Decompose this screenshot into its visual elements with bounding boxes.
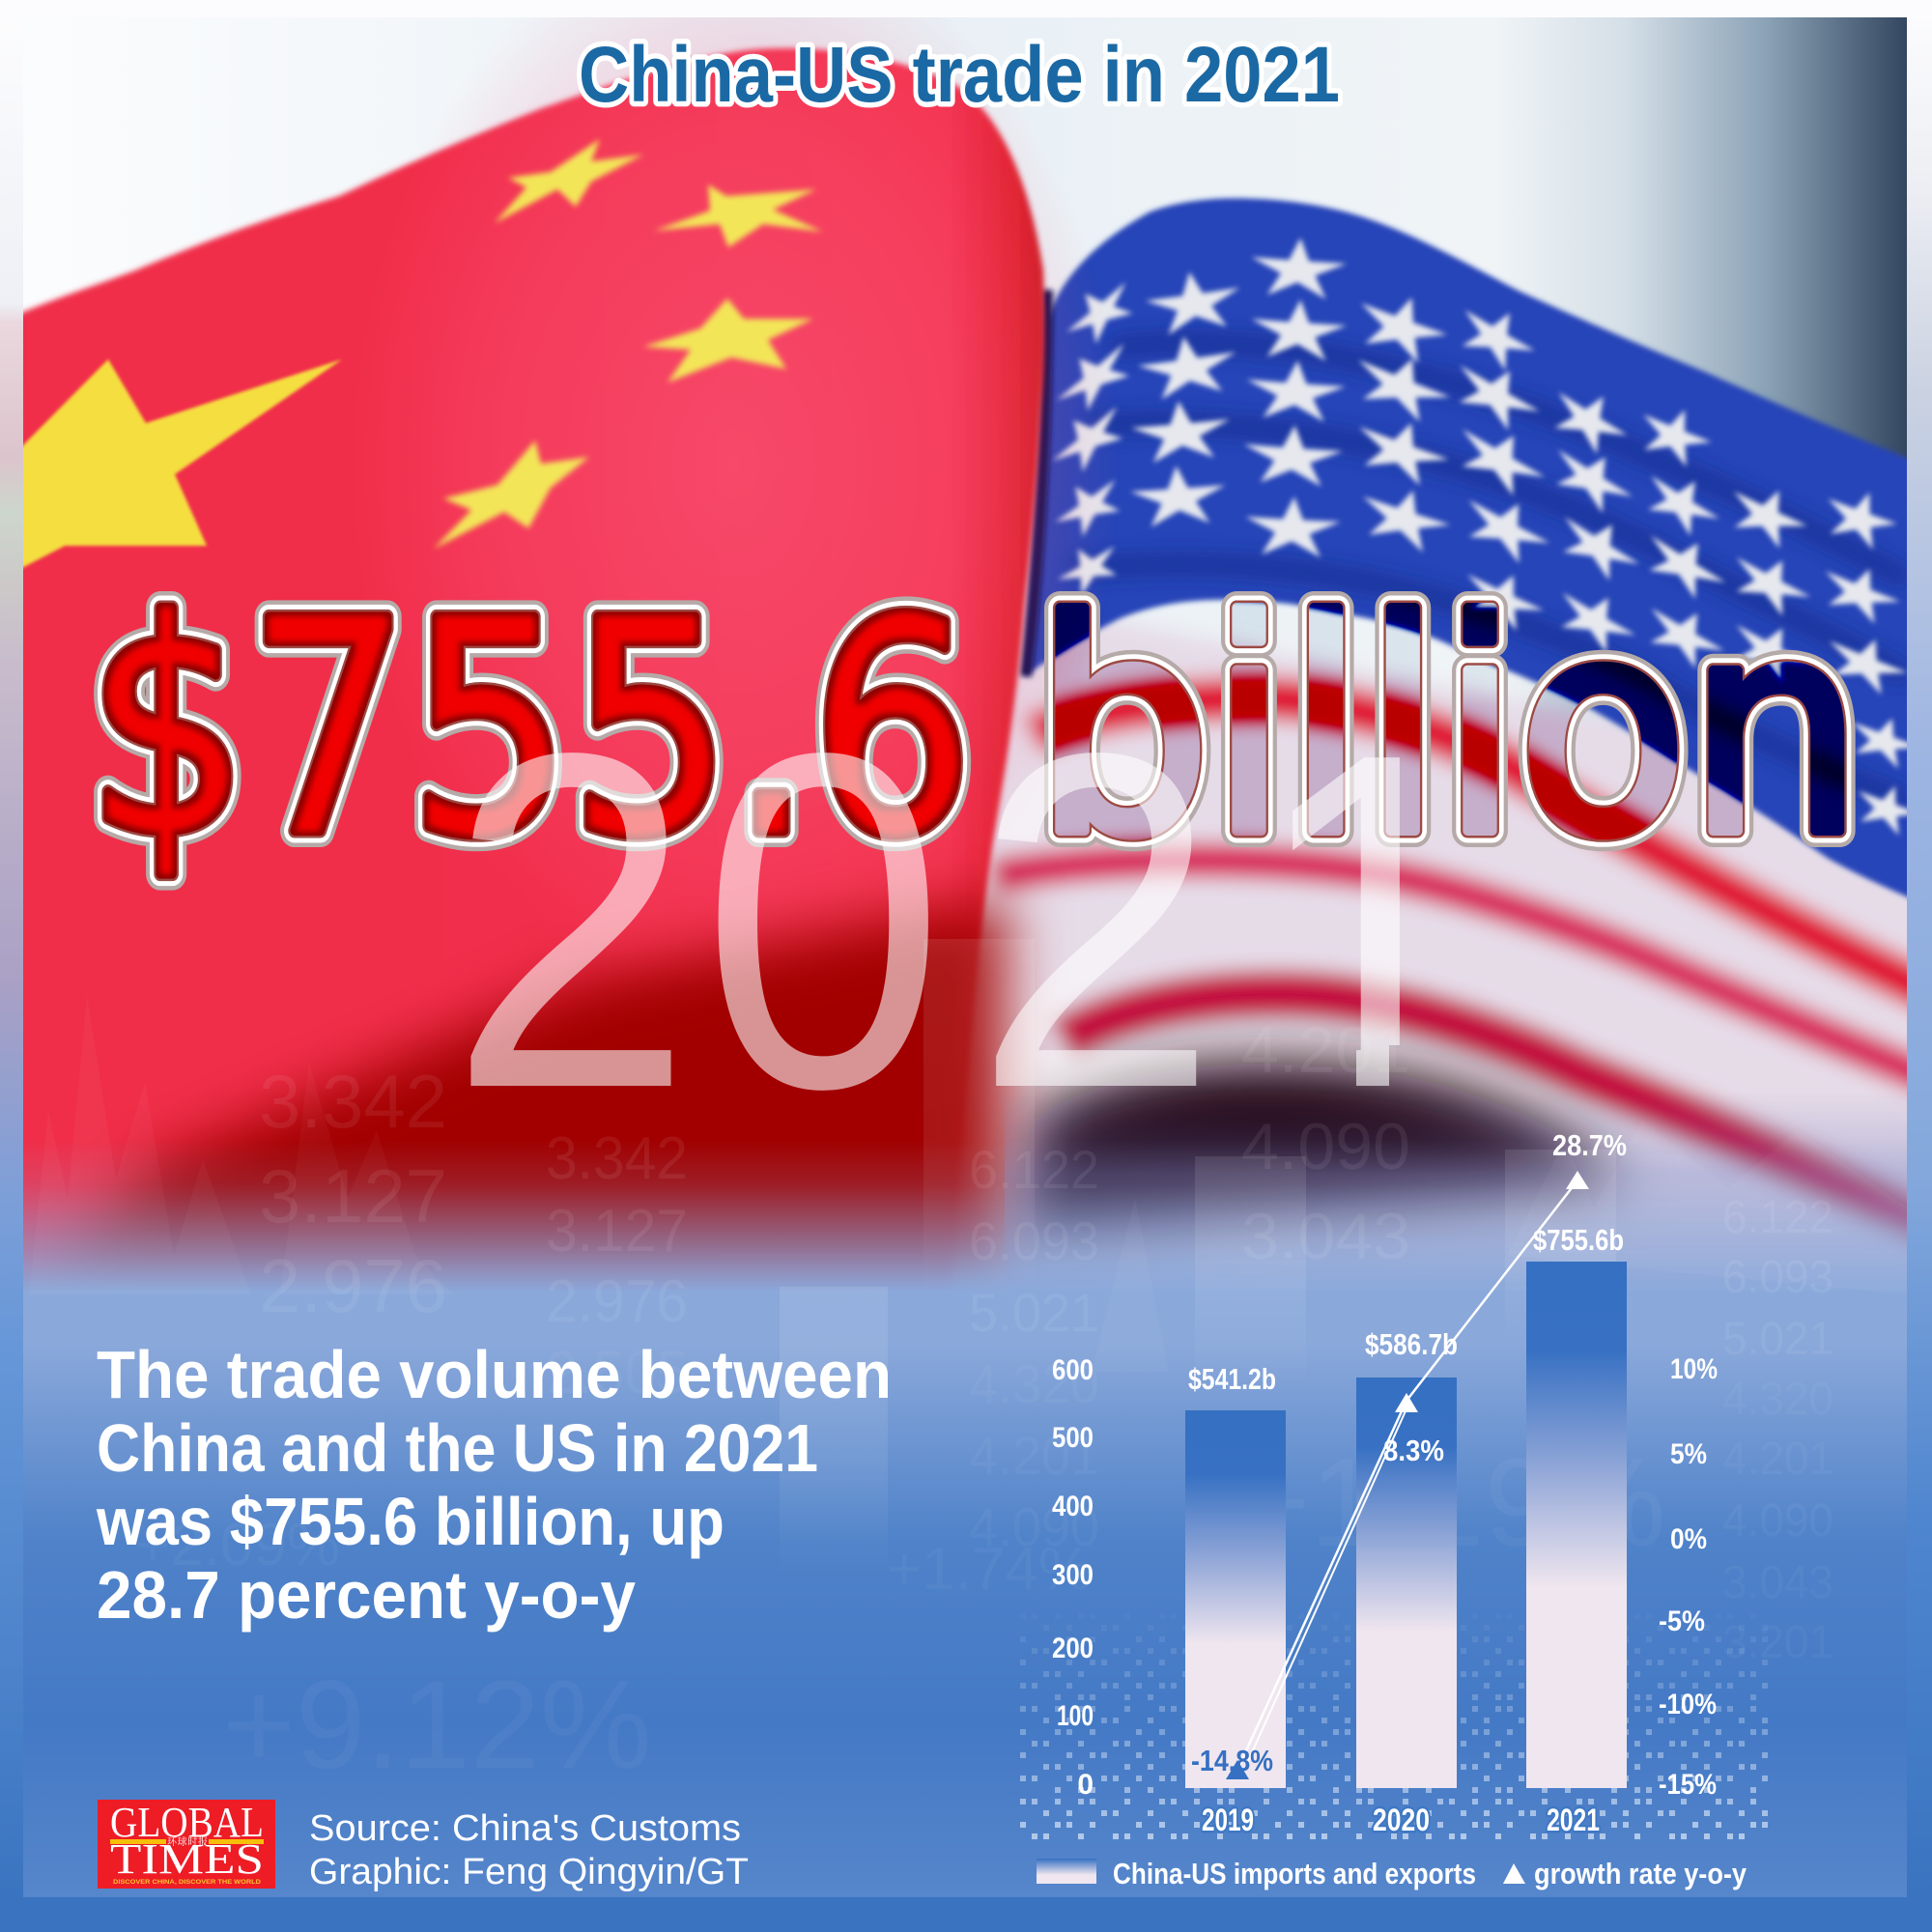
summary text: The trade volume between <box>97 1337 892 1412</box>
bar value labels <box>1188 1223 1624 1396</box>
canton dark bands <box>1072 343 1907 802</box>
left axis: 400 <box>1052 1491 1094 1522</box>
faint background numbers: 3.342 <box>259 1059 447 1144</box>
big word: billion: billion <box>1035 558 1863 900</box>
faint background numbers: 2.976 <box>259 1243 447 1328</box>
blue canton <box>1024 198 1932 923</box>
faint background numbers: 5.021 <box>969 1282 1099 1343</box>
left navy edge <box>1026 290 1047 676</box>
faint background numbers: 6.122 <box>1722 1192 1833 1243</box>
legend: China-US imports and exports <box>1113 1857 1476 1890</box>
faint background numbers: 3.342 <box>546 1125 688 1192</box>
year labels: 2019 <box>1202 1803 1254 1837</box>
logo: Global Times: TIMES <box>110 1835 264 1883</box>
logo: Global Times: 环球时报 <box>167 1833 208 1848</box>
faint background numbers: 2.505 <box>546 1340 688 1406</box>
dark red shadow on the red flag <box>39 898 1005 1294</box>
blue lower panel <box>23 1140 1907 1897</box>
China flag <box>0 0 1121 1294</box>
bar chart <box>1037 1128 1747 1890</box>
faint background numbers: 6.122 <box>969 1139 1099 1200</box>
year labels: 2021 <box>1547 1803 1600 1837</box>
title: China-US trade in 2021 <box>579 31 1340 119</box>
faint background numbers: 4.090 <box>969 1496 1099 1557</box>
faint background numbers: 4.090 <box>1241 1110 1410 1183</box>
legend: growth rate y-o-y <box>1534 1857 1747 1890</box>
US flag <box>976 193 1907 1285</box>
growth labels: 28.7% <box>1552 1128 1627 1162</box>
left axis: 0 <box>1077 1769 1094 1801</box>
big number: $755.6: $755.6 <box>87 558 973 900</box>
summary text: 28.7 percent y-o-y <box>97 1557 636 1633</box>
faint background numbers: 3.127 <box>259 1153 447 1238</box>
growth labels: 8.3% <box>1383 1434 1444 1467</box>
dark shadow under US flag <box>1014 1064 1623 1246</box>
left axis <box>1052 1354 1094 1801</box>
right axis: 10% <box>1670 1353 1718 1385</box>
faint background numbers <box>135 1013 1833 1795</box>
growth labels <box>1191 1128 1627 1777</box>
faint background numbers: 3.127 <box>546 1198 688 1264</box>
right axis: 0% <box>1670 1523 1707 1555</box>
bar value labels: $541.2b <box>1188 1362 1276 1396</box>
source and credit: Source: China's Customs <box>309 1808 741 1849</box>
right axis: -5% <box>1659 1605 1705 1637</box>
US field and stripes <box>976 620 1907 1285</box>
title: China-US trade in 2021 <box>579 31 1340 119</box>
big number: $755.6: $755.6 <box>87 558 973 900</box>
faint background rectangles <box>780 939 1616 1577</box>
left axis: 200 <box>1052 1633 1094 1664</box>
right axis: -15% <box>1659 1769 1717 1801</box>
faint background numbers: 3.043 <box>1722 1557 1833 1608</box>
logo: Global Times: GLOBAL <box>110 1799 264 1846</box>
red field <box>0 48 1044 1294</box>
faint background numbers: 4.201 <box>969 1425 1099 1486</box>
faint background numbers: 4.201 <box>1241 1013 1410 1087</box>
right axis: -10% <box>1659 1689 1717 1720</box>
faint background numbers: 4.320 <box>969 1353 1099 1414</box>
logo: Global Times <box>98 1799 275 1889</box>
summary text <box>96 1337 892 1633</box>
big number: $755.6: $755.6 <box>87 558 973 900</box>
faint background numbers: 4.090 <box>1722 1495 1833 1547</box>
right axis <box>1659 1353 1718 1801</box>
sky backdrop <box>23 17 1907 894</box>
small yellow stars <box>434 139 823 549</box>
faint background numbers: 6.093 <box>1722 1252 1833 1303</box>
faint background numbers: 6.093 <box>969 1210 1099 1271</box>
bars <box>1185 1262 1627 1788</box>
faint background numbers: 2.976 <box>546 1268 688 1335</box>
source and credit <box>309 1808 749 1892</box>
faint mountain texture <box>29 995 1907 1372</box>
big word: billion: billion <box>1035 558 1863 900</box>
growth labels: -14.8% <box>1191 1744 1273 1777</box>
big word: billion: billion <box>1035 558 1863 900</box>
pink highlight <box>421 17 1097 898</box>
growth markers <box>1226 1171 1589 1779</box>
faint background numbers: 4.320 <box>1722 1374 1833 1425</box>
watermark year 2021: 2021 <box>449 653 1494 1187</box>
year labels <box>1202 1803 1600 1837</box>
faint background numbers: +1.74% <box>887 1536 1092 1603</box>
logo: Global Times: DISCOVER CHINA, DISCOVER THE WORLD <box>113 1880 262 1886</box>
legend <box>1037 1857 1747 1890</box>
summary text: China and the US in 2021 <box>97 1410 818 1486</box>
source and credit: Graphic: Feng Qingyin/GT <box>309 1852 749 1892</box>
big number: $755.6: $755.6 <box>87 558 973 900</box>
faint background numbers: +9.12% <box>222 1654 652 1795</box>
left axis: 300 <box>1052 1559 1094 1591</box>
summary text: was $755.6 billion, up <box>96 1484 724 1559</box>
right axis: 5% <box>1670 1438 1707 1470</box>
faint background numbers: 3.201 <box>1722 1617 1833 1668</box>
dot pattern <box>1020 1613 1769 1841</box>
faint background numbers: 3.043 <box>1241 1200 1410 1273</box>
year labels: 2020 <box>1373 1803 1430 1837</box>
faint background numbers: +2.09% <box>135 1512 340 1578</box>
growth line <box>1237 1180 1577 1770</box>
left axis: 500 <box>1052 1422 1094 1454</box>
big word: billion: billion <box>1035 558 1863 900</box>
left axis: 100 <box>1057 1700 1094 1732</box>
faint background numbers: 5.021 <box>1722 1314 1833 1365</box>
haze over US flag bottom <box>1005 1103 1907 1267</box>
left axis: 600 <box>1052 1354 1094 1386</box>
bar value labels: $586.7b <box>1365 1327 1458 1361</box>
US stars <box>1041 235 1927 839</box>
faint background numbers: 4.201 <box>1722 1434 1833 1485</box>
bar value labels: $755.6b <box>1533 1223 1624 1257</box>
faint background numbers: +1.19% <box>1236 1432 1666 1573</box>
big yellow star <box>14 359 342 572</box>
